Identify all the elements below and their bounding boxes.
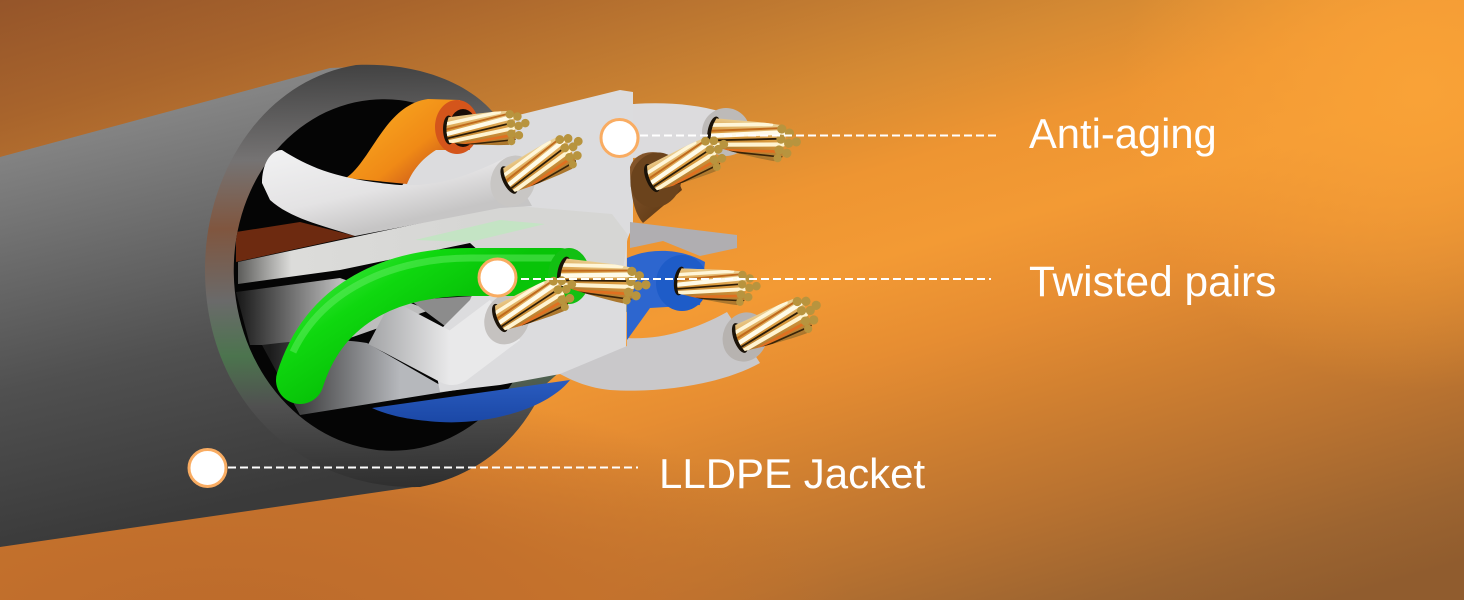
copper: brown conductor [639, 130, 736, 197]
blue wire [627, 251, 708, 340]
spline: horizontal band [238, 205, 628, 290]
label: LLDPE Jacket: LLDPE Jacket [659, 450, 925, 497]
leader line: twisted pairs [521, 278, 991, 280]
marker: anti-aging [601, 120, 638, 156]
spline: right wing [630, 222, 737, 256]
white wire: lower bend [380, 286, 538, 360]
label: Anti-aging: Anti-aging [1029, 110, 1217, 157]
marker: twisted pairs [479, 259, 516, 296]
white wire: lower right [560, 306, 775, 391]
hole interior [216, 84, 560, 466]
copper: orange conductor [442, 109, 530, 148]
leader line: anti-aging [640, 134, 1000, 136]
grey upper wire [236, 278, 430, 345]
copper: white upper conductor [495, 127, 592, 199]
jacket body [0, 66, 420, 547]
jacket end ring [205, 65, 640, 487]
copper: white lower conductor [487, 270, 584, 337]
copper: white right conductor [727, 290, 829, 358]
green reflection [415, 220, 545, 242]
grey lower wedge [262, 340, 459, 415]
spline: central block [400, 90, 633, 392]
rust shadow [236, 222, 355, 262]
copper: white top-right conductor [704, 112, 803, 166]
marker: jacket [189, 450, 226, 486]
leader line: jacket [228, 466, 638, 468]
copper: green conductor [554, 252, 654, 309]
label: Twisted pairs: Twisted pairs [1029, 258, 1276, 305]
copper: blue conductor [672, 263, 762, 308]
white wire: upper [262, 149, 543, 236]
brown wire [622, 144, 690, 223]
green wire [293, 248, 590, 380]
orange wire [346, 99, 479, 184]
interior wires and shadows [236, 222, 472, 415]
grey notch [414, 296, 472, 326]
blue lower wire [372, 380, 570, 422]
white wire: top right [633, 103, 750, 158]
